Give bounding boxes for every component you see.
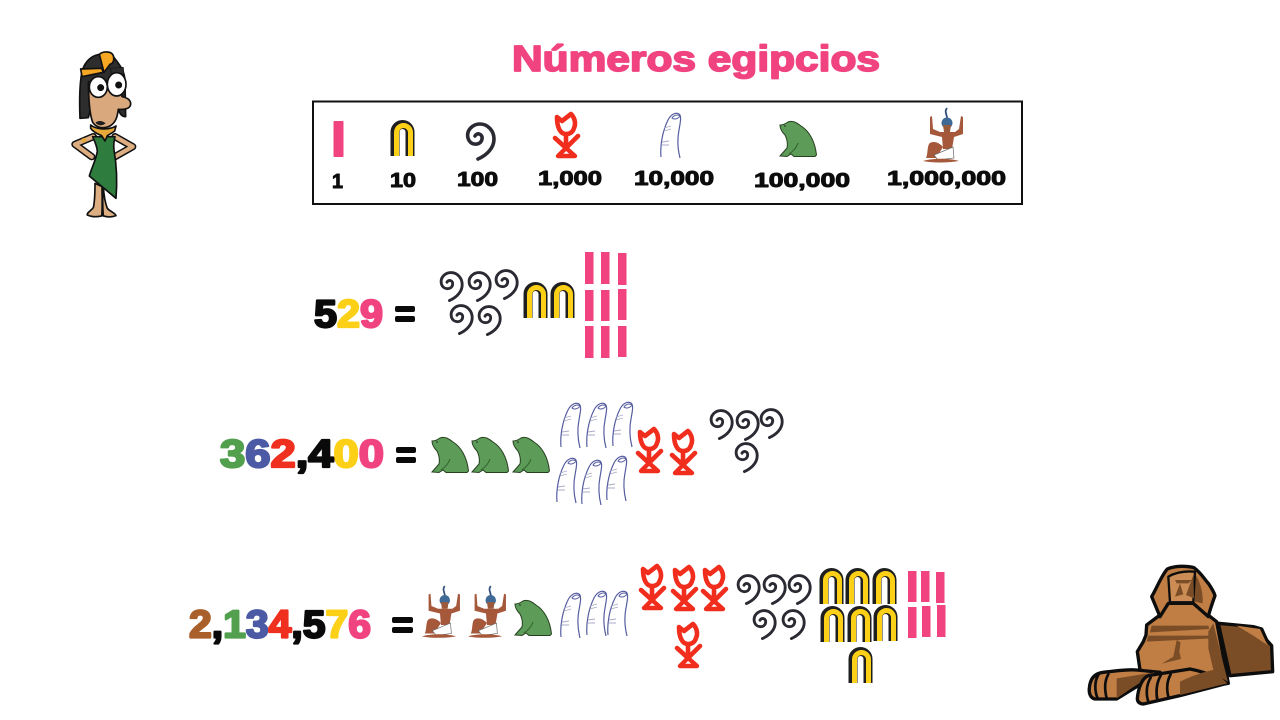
symbol 10,000: finger — [634, 113, 714, 190]
one frog — [515, 600, 552, 636]
symbol 1,000,000: kneeling man: 1,000,000 — [887, 167, 1006, 190]
symbol 100: coil of rope — [457, 124, 498, 191]
five rope coils — [441, 271, 517, 335]
four lotus flowers — [641, 566, 726, 666]
symbol 100: coil of rope: 100 — [457, 168, 498, 191]
symbol 1,000,000: kneeling man — [887, 108, 1006, 190]
character: Egyptian woman — [75, 52, 133, 217]
four rope coils — [711, 410, 782, 472]
illustration: sphinx — [1089, 566, 1273, 704]
symbol 1,000: lotus — [538, 114, 602, 190]
equals sign — [392, 617, 413, 633]
symbol 10: heel bone: 10 — [390, 169, 416, 192]
panel: symbol key table — [313, 102, 1022, 204]
two heel bones — [528, 286, 570, 318]
three fingers — [561, 591, 628, 638]
symbol 1: stroke — [332, 121, 344, 193]
example: 529 — [314, 252, 626, 358]
example: 362,400 — [220, 402, 782, 505]
three frogs — [432, 437, 550, 472]
seven heel bones — [824, 572, 894, 683]
number 362,400: 362,400 — [220, 433, 384, 476]
equals sign — [395, 306, 415, 322]
equals sign — [396, 447, 416, 463]
symbol 10,000: finger: 10,000 — [634, 167, 714, 190]
symbol 10: heel bone — [390, 124, 416, 192]
two lotus flowers — [638, 429, 695, 473]
number 2,134,576: 2,134,576 — [189, 604, 371, 646]
symbol 100,000: frog: 100,000 — [754, 169, 850, 192]
two kneeling men — [422, 586, 506, 638]
symbol 1: stroke: 1 — [332, 170, 343, 193]
example: 2,134,576 — [189, 566, 946, 683]
symbol 100,000: frog — [754, 121, 850, 192]
five rope coils — [738, 576, 810, 639]
number 529: 529 — [314, 293, 383, 336]
six strokes — [908, 571, 946, 638]
title: Números egipcios — [512, 38, 880, 79]
six fingers — [557, 402, 633, 505]
symbol 1,000: lotus: 1,000 — [538, 167, 602, 190]
nine strokes — [585, 252, 626, 358]
